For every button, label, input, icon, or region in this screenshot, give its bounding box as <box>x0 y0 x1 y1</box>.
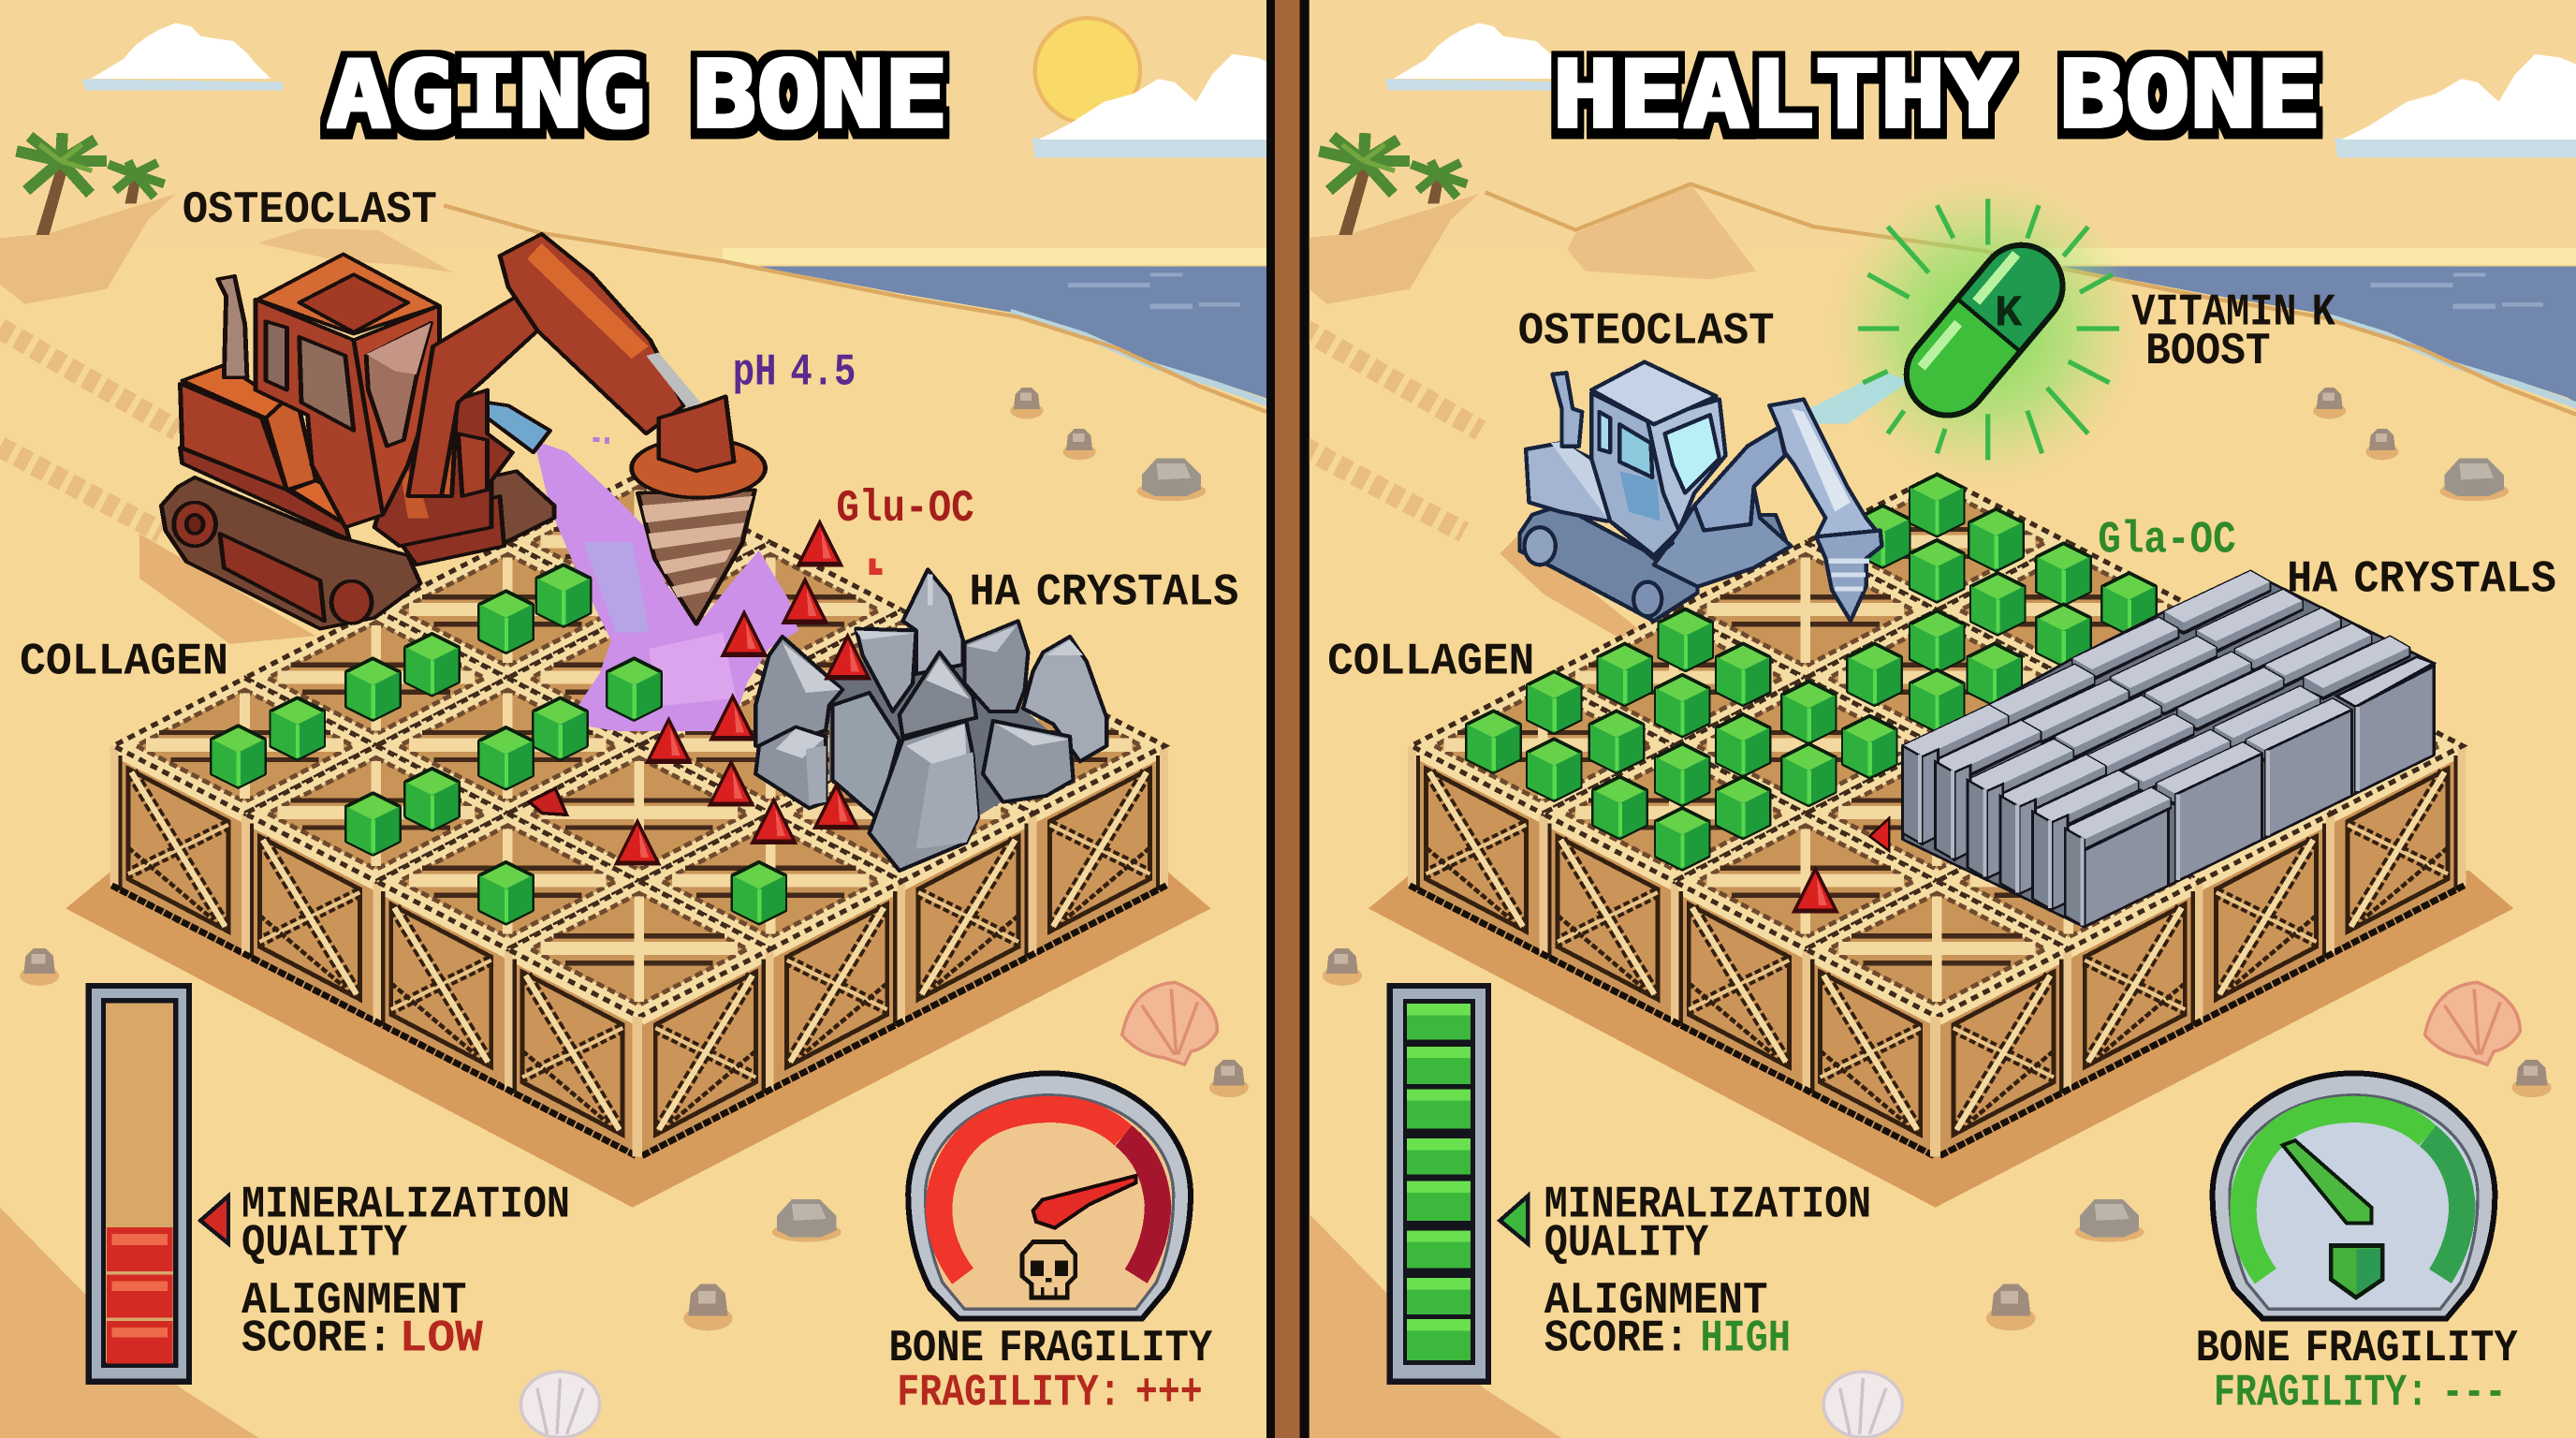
text: alignment score low: LOW <box>399 1314 484 1365</box>
skull icon <box>1022 1242 1076 1298</box>
lower boom <box>408 297 546 496</box>
meter pointer arrow <box>200 1196 228 1243</box>
beach background <box>1286 0 2576 1438</box>
blue osteoclast excavator with drill <box>1519 362 1881 621</box>
cabin <box>1591 362 1726 555</box>
far track <box>488 471 554 543</box>
label: vitamin K boost: VITAMIN K <box>2131 288 2336 339</box>
label: Gla-OC: Gla-OC <box>2098 516 2236 566</box>
aligned HA crystal slabs <box>1903 571 2434 927</box>
rear engine <box>1526 442 1673 559</box>
blue excavator spray <box>1808 372 1909 424</box>
capsule K letter: K <box>1995 291 2024 340</box>
drill bit <box>637 490 754 624</box>
exhaust stack <box>1552 373 1582 447</box>
mineral cubes <box>212 565 785 923</box>
drill mount <box>632 396 766 498</box>
near track <box>161 477 420 629</box>
panel: healthy bone <box>1286 0 2576 1438</box>
red cones over the crystals <box>753 636 869 844</box>
text: mineralization quality: QUALITY <box>242 1219 408 1269</box>
rear engine <box>180 365 371 540</box>
vitamin K capsule <box>1890 228 2079 433</box>
far dune and ridge <box>258 205 723 272</box>
label: osteoclast: OSTEOCLAST <box>1518 307 1775 359</box>
text: alignment score low: ALIGNMENT <box>242 1276 466 1328</box>
cloud over sun <box>1072 91 1138 125</box>
red Glu-OC cones <box>1794 818 1889 914</box>
label: collagen: COLLAGEN <box>1327 638 1534 688</box>
red Glu-OC cones <box>529 522 882 866</box>
drill bit <box>1816 531 1881 621</box>
meter pointer arrow <box>1500 1196 1528 1243</box>
lower boom <box>1694 428 1785 531</box>
title: aging bone: AGING BONE <box>327 42 948 149</box>
mineralization meter <box>1390 986 1488 1382</box>
label: HA crystals: HA CRYSTALS <box>2287 555 2556 606</box>
far track <box>1750 515 1788 568</box>
panel: divider <box>1266 0 1310 1438</box>
fragility gauge <box>908 1073 1191 1318</box>
upper boom <box>500 234 700 433</box>
red osteoclast excavator with drill <box>161 234 766 629</box>
label: Glu-OC: Glu-OC <box>836 485 974 536</box>
excavator ground shadow <box>139 534 315 644</box>
collagen crate lattice <box>110 475 1168 1156</box>
far dune and ridge <box>1486 184 2026 279</box>
exhaust stack <box>218 276 247 377</box>
text: alignment score high: HIGH <box>1701 1314 1791 1365</box>
beach background <box>0 0 1306 1438</box>
nozzle <box>488 403 550 452</box>
shield icon <box>2331 1246 2382 1298</box>
label: vitamin K boost: BOOST <box>2145 327 2271 378</box>
sun <box>1035 18 1140 124</box>
panel: aging bone <box>0 0 1306 1438</box>
title: healthy bone: HEALTHY BONE <box>1553 42 2321 149</box>
value: fragility: FRAGILITY: --- <box>2214 1369 2506 1419</box>
vitamin K rays <box>1858 198 2119 460</box>
text: mineralization quality: QUALITY <box>1544 1219 1709 1269</box>
label: collagen: COLLAGEN <box>20 638 228 688</box>
collagen crate lattice <box>1408 475 2466 1156</box>
label: bone fragility: BONE FRAGILITY <box>2196 1324 2518 1375</box>
label: bone fragility: BONE FRAGILITY <box>889 1324 1213 1375</box>
acid spray <box>534 437 798 731</box>
label: pH 4.5: pH 4.5 <box>733 348 856 399</box>
text: alignment score high: SCORE: <box>1544 1314 1689 1365</box>
label: HA crystals: HA CRYSTALS <box>970 568 1238 620</box>
fragility gauge <box>2213 1073 2495 1318</box>
near track <box>1519 506 1698 621</box>
mineral cubes <box>1467 475 2156 869</box>
excavator ground shadow <box>1500 534 1643 638</box>
label: osteoclast: OSTEOCLAST <box>183 185 437 237</box>
text: mineralization quality: MINERALIZATION <box>1544 1181 1871 1231</box>
arm base machinery <box>1654 487 1792 587</box>
mineralization meter <box>89 986 189 1382</box>
text: alignment score low: SCORE: <box>242 1314 392 1365</box>
cabin <box>256 255 439 527</box>
arm base machinery <box>373 388 515 548</box>
text: mineralization quality: MINERALIZATION <box>242 1181 570 1231</box>
text: alignment score high: ALIGNMENT <box>1544 1276 1767 1328</box>
value: fragility +++: FRAGILITY: +++ <box>897 1369 1203 1419</box>
upper boom <box>1769 400 1881 555</box>
jagged HA crystals <box>755 569 1106 871</box>
vitamin K glow <box>1828 172 2141 485</box>
